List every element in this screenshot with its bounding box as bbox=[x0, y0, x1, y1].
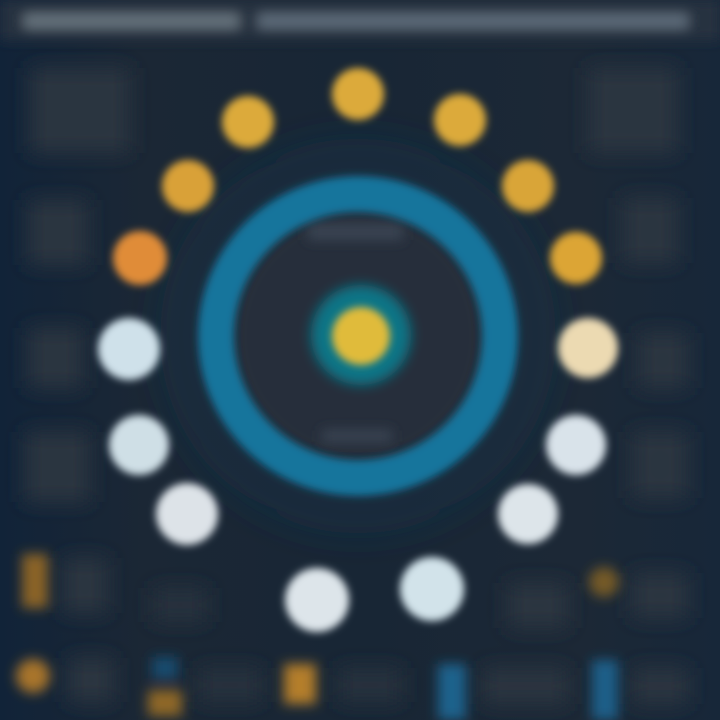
center icon bbox=[311, 285, 411, 385]
ring interior bbox=[228, 206, 488, 466]
panel: right text blocks bbox=[483, 68, 688, 704]
bottom icons bbox=[16, 554, 619, 720]
ring inner text blocks bbox=[308, 224, 403, 442]
panel: left text blocks bbox=[25, 68, 130, 702]
ring glow bbox=[180, 158, 536, 514]
panel: bottom text blocks bbox=[153, 588, 402, 702]
white circles bbox=[98, 318, 618, 632]
title bar bbox=[0, 0, 720, 40]
blue ring bbox=[216, 194, 500, 478]
yellow circles bbox=[113, 68, 602, 285]
